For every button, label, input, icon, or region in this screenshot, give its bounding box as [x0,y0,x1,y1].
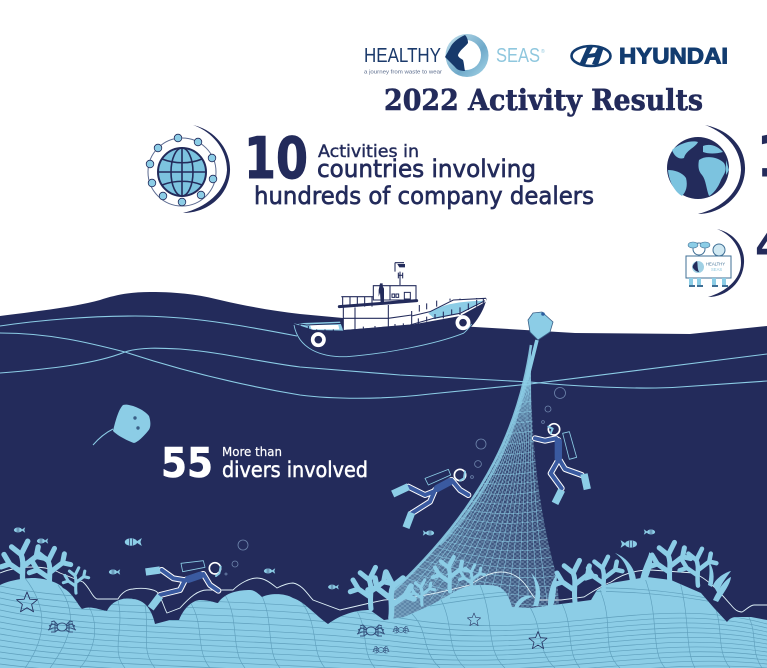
stat: 10 activities: hundreds of company dealers [254,182,594,210]
water lines [0,316,767,398]
buoy and rope [527,312,553,380]
logo: Hyundai [572,44,728,68]
seabed [0,577,767,668]
upper deck bar [339,301,417,307]
stat: 10 activities: countries involving [317,155,536,183]
ship [293,263,487,357]
ship lines [293,263,486,333]
icon: children holding sign: SEAS [711,267,722,272]
starfish [17,592,547,649]
logo: Hyundai: HYUNDAI [619,44,728,68]
bubbles [225,388,566,575]
icon: children holding sign: HEALTHY [706,262,725,266]
icon: earth globe [667,125,745,214]
stat: 10 activities: 10 [244,126,308,192]
stat: 55 divers: More than [222,444,282,459]
diver: right, at net [535,424,587,503]
light blue decks [428,301,484,319]
sea grass [514,552,731,608]
diver: bottom, at reef [146,561,221,608]
cabin windows [392,292,410,299]
sea [0,292,767,668]
seabed mesh [0,578,767,668]
life rings [313,334,324,345]
fishing net [385,345,560,620]
stingray [93,405,150,445]
hull [293,298,487,357]
hull outline [294,324,472,357]
stat: 10 activities: Activities in [318,142,419,161]
stat: 55 divers: 55 [161,439,213,487]
title: 2022 Activity Results [384,83,703,117]
stat: 10 activities [244,126,594,210]
diver: left, mid water [393,469,468,528]
logo: Healthy Seas: SEAS [496,45,540,67]
stat: 55 divers: divers involved [222,458,368,482]
crew member [379,283,384,303]
stat: 55 divers [161,439,368,487]
logo: Healthy Seas: a journey from waste to wear [364,70,442,76]
white superstructure [343,298,486,330]
logo: Healthy Seas: HEALTHY [364,45,441,67]
icon: children holding sign [686,229,744,297]
crabs [48,621,409,653]
icon: networked globe [146,125,230,213]
logo: Healthy Seas: ® [541,48,545,55]
corals [1,541,716,618]
thin white reef outline [0,567,767,613]
fish [14,527,655,590]
logo: Healthy Seas [364,34,545,77]
